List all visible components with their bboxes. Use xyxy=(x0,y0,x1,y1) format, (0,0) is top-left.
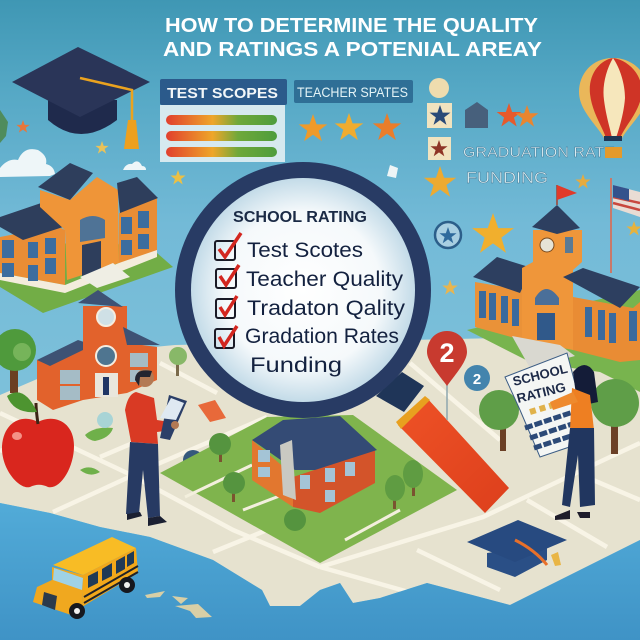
icon: trees right xyxy=(479,379,639,454)
icon: hot air balloon xyxy=(579,58,640,158)
icon: small decorative stars xyxy=(16,120,640,294)
illustration: center school xyxy=(252,416,377,513)
illustration: school left top xyxy=(0,163,173,313)
panel: magnifying glass lens xyxy=(175,162,431,418)
icons: map blobs xyxy=(80,400,226,475)
icon: islands xyxy=(145,591,212,618)
text: graduation rate and funding xyxy=(463,144,615,187)
title: HOW TO DETERMINE THE QUALITY xyxy=(165,15,539,37)
icon: small star xyxy=(442,280,458,294)
icon: map pin number 2 xyxy=(427,331,467,420)
heading: school rating: SCHOOL RATING xyxy=(233,209,367,226)
icon: magnifying glass handle xyxy=(376,372,509,513)
icon: tree top left xyxy=(0,329,36,393)
sea xyxy=(0,503,640,640)
checklist xyxy=(245,239,406,377)
icon: small pin badge: 2 xyxy=(473,371,481,388)
label: teacher rates: TEACHER SPATES xyxy=(297,84,408,100)
icon: trees center xyxy=(209,433,423,531)
icon: apple xyxy=(2,392,74,487)
illustration: school left bottom with clock tower xyxy=(37,290,160,410)
illustration: person right with poster: SCHOOL xyxy=(511,361,569,389)
illustration: person right with poster xyxy=(505,353,598,520)
icon: rating stars row xyxy=(299,113,401,141)
map base xyxy=(0,338,640,606)
icon: big star xyxy=(472,213,514,253)
icon: rating badges xyxy=(424,78,538,197)
illustration: person left with tablet xyxy=(125,369,187,526)
text: graduation rate and funding: GRADUATION RATE xyxy=(463,144,615,161)
icon: star with circle badge xyxy=(435,222,461,248)
icon: small cloud xyxy=(123,161,146,170)
panel: test scores bars: TEST SCOPES xyxy=(167,85,278,102)
icon: map pin number 2: 2 xyxy=(439,338,455,368)
illustration: person right with poster: RATING xyxy=(515,379,567,406)
icon: graduation cap xyxy=(12,47,150,149)
checklist: Test Scotes xyxy=(247,239,363,262)
icon: small graduation cap xyxy=(467,520,567,577)
icon: american flag xyxy=(611,178,640,273)
label: teacher rates xyxy=(294,80,413,103)
icon: tree small xyxy=(169,347,187,376)
icon: cloud xyxy=(0,149,55,177)
title: AND RATINGS A POTENIAL AREAY xyxy=(163,39,543,61)
checklist: Gradation Rates xyxy=(245,325,399,348)
icon: school bus xyxy=(33,537,138,619)
icon: red flag on tower xyxy=(557,185,577,205)
checklist: Funding xyxy=(250,354,342,377)
checklist: Teacher Quality xyxy=(246,268,404,291)
panel: test scores bars xyxy=(160,79,287,162)
text: graduation rate and funding: FUNDING xyxy=(466,170,548,187)
illustration: center school yard xyxy=(160,415,457,563)
check marks xyxy=(215,233,241,348)
illustration: school right with tower xyxy=(467,205,640,392)
icon: globe edge xyxy=(0,110,8,143)
icon: small pin badge xyxy=(464,365,490,391)
checklist: Tradaton Qality xyxy=(247,297,406,320)
title xyxy=(163,15,543,61)
